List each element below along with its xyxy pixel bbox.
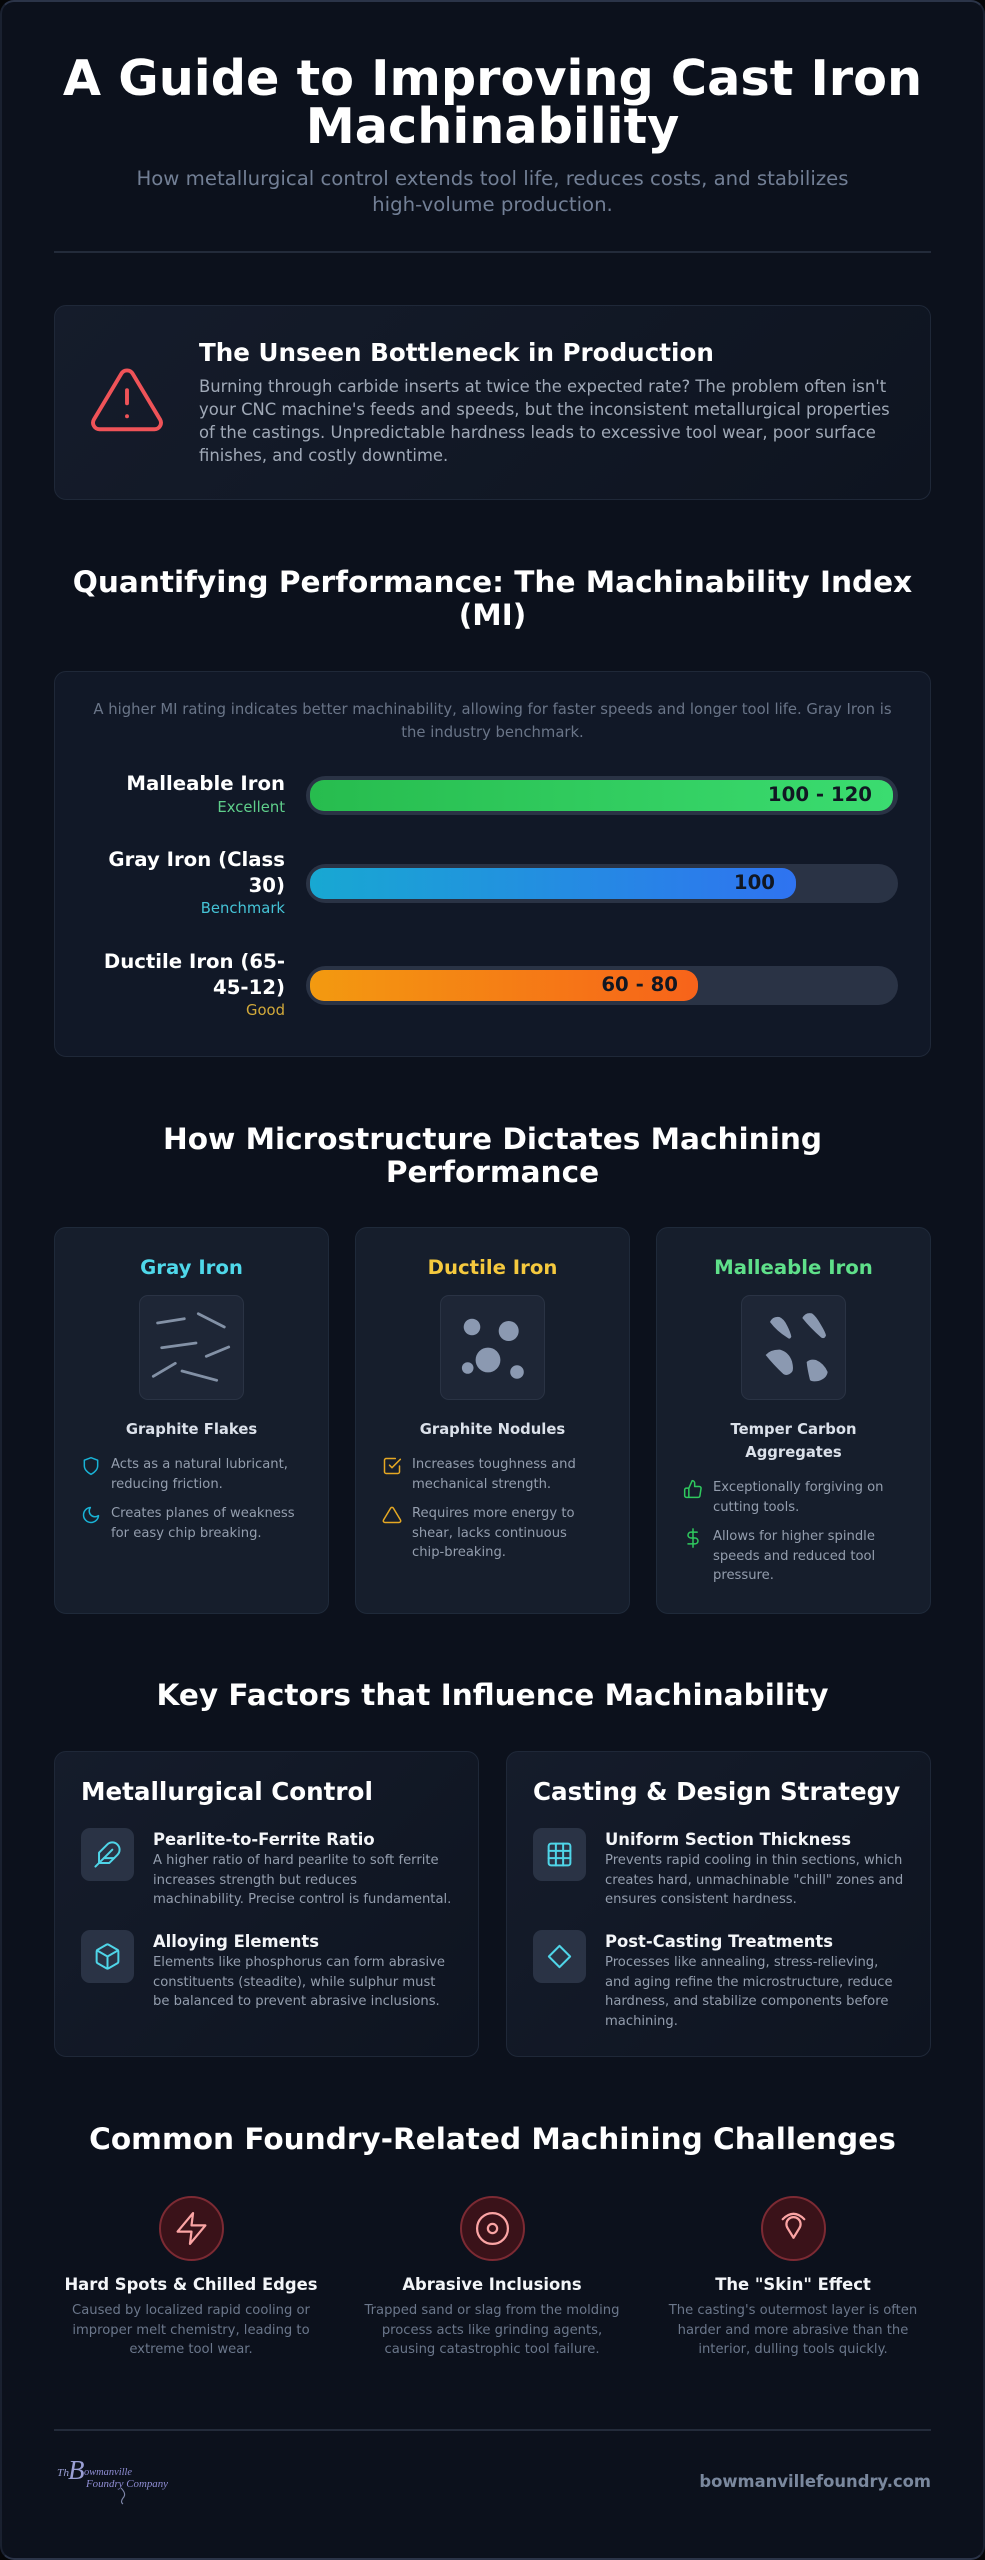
text: chip breaking: for easy chip breaking. xyxy=(111,1526,262,1541)
card subtitle: temper carbon aggregates: Aggregates xyxy=(745,1444,842,1461)
bar: 100 - 120 xyxy=(306,776,898,815)
text: alloying elements: Elements like phosphorus can form abrasive xyxy=(153,1955,445,1970)
heading: machinability index: (MI) xyxy=(459,598,526,632)
label: ductile iron xyxy=(104,950,285,999)
text: MI intro: A higher MI rating indicates better machinability, allowing for faster speeds and longer tool life. Gray Iron is xyxy=(93,701,892,718)
icon: lightning bolt xyxy=(159,2196,224,2261)
card title: ductile iron: Ductile Iron xyxy=(428,1256,557,1279)
card title: gray iron: Gray Iron xyxy=(140,1256,243,1279)
rating: good: Good xyxy=(246,1002,285,1019)
text: bottleneck description xyxy=(199,377,890,465)
panel: ductile iron xyxy=(355,1227,630,1614)
heading: machinability index: Quantifying Performance: The Machinability Index xyxy=(73,565,912,599)
title: Machinability xyxy=(306,97,679,155)
factor: pearlite ratio xyxy=(81,1828,451,1907)
text: toughness: Increases toughness and xyxy=(412,1457,576,1472)
text: alloying elements: be balanced to prevent abrasive inclusions. xyxy=(153,1994,440,2009)
text: natural lubricant: reducing friction. xyxy=(111,1477,223,1492)
text: pearlite ratio xyxy=(153,1853,451,1907)
logo: the bowmanville foundry company: B xyxy=(68,2455,84,2485)
footer divider xyxy=(54,2429,931,2431)
challenge: hard spots xyxy=(41,2196,341,2366)
text: uniform section thickness xyxy=(605,1853,903,1907)
text: bottleneck description: of the castings. Unpredictable hardness leads to excessive tool wear, poor surface xyxy=(199,423,876,442)
icon: dollar xyxy=(687,1528,699,1548)
panel title: casting and design: Casting & Design Strategy xyxy=(533,1777,900,1806)
diagram: graphite nodules xyxy=(440,1295,545,1400)
heading: microstructure: How Microstructure Dictates Machining xyxy=(163,1122,822,1156)
text: chip breaking xyxy=(111,1506,295,1541)
challenge text: skin effect: The casting's outermost layer is often xyxy=(669,2303,917,2318)
text: uniform section thickness: creates hard, unmachinable "chill" zones and xyxy=(605,1873,903,1888)
heading: microstructure xyxy=(163,1122,822,1189)
panel: malleable iron xyxy=(656,1227,931,1614)
bar: 60 - 80 xyxy=(306,966,898,1005)
logo: the bowmanville foundry company xyxy=(54,2454,169,2506)
challenge text: abrasive inclusions: causing catastrophic tool failure. xyxy=(384,2342,600,2357)
panel: machinability index chart xyxy=(54,671,931,1057)
icon: diamond xyxy=(533,1930,586,1983)
challenge: skin effect xyxy=(643,2196,943,2366)
panel: the unseen bottleneck xyxy=(54,305,931,500)
bar: 60 - 80: 60 - 80 xyxy=(601,973,678,996)
text: spindle speeds: pressure. xyxy=(713,1568,774,1583)
challenge text: skin effect xyxy=(643,2301,943,2360)
text: post-casting treatments: machining. xyxy=(605,2014,678,2029)
title xyxy=(63,49,922,155)
icon: grid xyxy=(533,1828,586,1881)
label: ductile iron: 45-12) xyxy=(213,976,285,999)
card subtitle: temper carbon aggregates xyxy=(730,1421,857,1461)
challenge title: hard spots: Hard Spots & Chilled Edges xyxy=(64,2275,318,2294)
card subtitle: graphite nodules: Graphite Nodules xyxy=(420,1421,565,1438)
text: pearlite ratio: A higher ratio of hard pearlite to soft ferrite xyxy=(153,1853,439,1868)
text: MI intro: the industry benchmark. xyxy=(401,724,584,741)
challenge title: abrasive inclusions: Abrasive Inclusions xyxy=(402,2275,582,2294)
card title: malleable iron: Malleable Iron xyxy=(714,1256,873,1279)
heading: post-casting treatments: Post-Casting Treatments xyxy=(605,1932,833,1951)
challenge text: abrasive inclusions: Trapped sand or slag from the molding xyxy=(365,2303,619,2318)
subtitle: How metallurgical control extends tool life, reduces costs, and stabilizes xyxy=(136,167,849,190)
text: alloying elements: constituents (steadite), while sulphur must xyxy=(153,1975,435,1990)
text: pearlite ratio: increases strength but reduces xyxy=(153,1873,357,1888)
icon: moon xyxy=(82,1506,100,1524)
challenge text: skin effect: interior, dulling tools quickly. xyxy=(698,2342,888,2357)
text: pearlite ratio: machinability. Precise control is fundamental. xyxy=(153,1892,451,1907)
text: bottleneck description: Burning through carbide inserts at twice the expected rate? The problem often isn't xyxy=(199,377,886,396)
label: gray iron: 30) xyxy=(249,874,285,897)
diagram: temper carbon aggregates xyxy=(741,1295,846,1400)
benefit: toughness xyxy=(384,1457,576,1492)
bar: 100: 100 xyxy=(734,871,775,894)
heading: uniform section thickness: Uniform Section Thickness xyxy=(605,1830,851,1849)
bar row: gray iron xyxy=(108,848,898,917)
text: post-casting treatments: Processes like annealing, stress-relieving, xyxy=(605,1955,878,1970)
label: ductile iron: Ductile Iron (65- xyxy=(104,950,285,973)
icon: feather xyxy=(81,1828,134,1881)
icon: thumbs up xyxy=(684,1480,702,1498)
text: natural lubricant: Acts as a natural lubricant, xyxy=(111,1457,288,1472)
panel: casting and design strategy xyxy=(506,1751,931,2057)
benefit: forgiving xyxy=(684,1480,883,1515)
challenge text: hard spots xyxy=(41,2301,341,2360)
heading: bottleneck: The Unseen Bottleneck in Production xyxy=(199,338,714,367)
benefit: natural lubricant xyxy=(84,1456,288,1492)
bar: 100 - 120: 100 - 120 xyxy=(768,783,872,806)
factor: uniform section thickness xyxy=(533,1828,903,1907)
text: spindle speeds: Allows for higher spindle xyxy=(713,1529,875,1544)
text: uniform section thickness: Prevents rapid cooling in thin sections, which xyxy=(605,1853,902,1868)
heading: pearlite ratio: Pearlite-to-Ferrite Ratio xyxy=(153,1830,375,1849)
challenge text: abrasive inclusions xyxy=(342,2301,642,2360)
text: energy to shear xyxy=(412,1506,575,1560)
text: uniform section thickness: ensures consistent hardness. xyxy=(605,1892,797,1907)
footer website: bowmanvillefoundry.com xyxy=(699,2472,931,2491)
icon: skin layer xyxy=(761,2196,826,2261)
text: post-casting treatments: and aging refine the microstructure, reduce xyxy=(605,1975,893,1990)
bar: 100 xyxy=(306,864,898,903)
subtitle xyxy=(136,167,849,216)
header divider xyxy=(54,251,931,253)
rating: benchmark: Benchmark xyxy=(201,900,285,917)
text: toughness xyxy=(412,1457,576,1492)
benefit: energy to shear xyxy=(382,1506,575,1560)
panel: gray iron xyxy=(54,1227,329,1614)
icon: shield xyxy=(84,1456,98,1476)
subtitle: high-volume production. xyxy=(372,193,613,216)
text: energy to shear: shear, lacks continuous xyxy=(412,1526,567,1541)
panel: metallurgical control xyxy=(54,1751,479,2057)
text: energy to shear: Requires more energy to xyxy=(412,1506,575,1521)
benefit: chip breaking xyxy=(82,1506,295,1541)
logo: the bowmanville foundry company: Foundry Company xyxy=(85,2478,168,2490)
text: bottleneck description: finishes, and costly downtime. xyxy=(199,446,448,465)
heading: key factors: Key Factors that Influence Machinability xyxy=(156,1678,829,1712)
icon: warning triangle xyxy=(91,368,163,432)
challenge text: skin effect: harder and more abrasive than the xyxy=(678,2323,908,2338)
text: forgiving: cutting tools. xyxy=(713,1500,799,1515)
text: bottleneck description: your CNC machine's feeds and speeds, but the inconsistent metallurgical properties xyxy=(199,400,890,419)
text: post-casting treatments: hardness, and stabilize components before xyxy=(605,1994,888,2009)
text: spindle speeds xyxy=(713,1529,875,1583)
icon: cube xyxy=(81,1930,134,1983)
factor: post-casting treatments xyxy=(533,1930,893,2029)
factor: alloying elements xyxy=(81,1930,445,2009)
logo: the bowmanville foundry company: owmanville xyxy=(84,2467,133,2478)
bar row: malleable iron xyxy=(126,772,898,816)
text: MI intro xyxy=(93,701,892,741)
text: toughness: mechanical strength. xyxy=(412,1477,551,1492)
rating: excellent: Excellent xyxy=(217,799,285,816)
diagram: graphite flakes xyxy=(139,1295,244,1400)
logo: the bowmanville foundry company: Th xyxy=(57,2468,69,2479)
challenge text: abrasive inclusions: process acts like grinding agents, xyxy=(382,2323,602,2338)
heading: machinability index xyxy=(73,565,912,632)
challenge text: hard spots: Caused by localized rapid cooling or xyxy=(72,2303,310,2318)
benefit: spindle speeds xyxy=(687,1528,875,1583)
text: spindle speeds: speeds and reduced tool xyxy=(713,1549,875,1564)
bar chart: machinability ratings xyxy=(104,772,898,1019)
challenge text: hard spots: extreme tool wear. xyxy=(129,2342,253,2357)
text: forgiving xyxy=(713,1480,883,1515)
text: energy to shear: chip-breaking. xyxy=(412,1545,506,1560)
heading: common challenges: Common Foundry-Related Machining Challenges xyxy=(89,2122,896,2156)
text: chip breaking: Creates planes of weakness xyxy=(111,1506,295,1521)
label: gray iron: Gray Iron (Class xyxy=(108,848,285,871)
challenge title: skin effect: The "Skin" Effect xyxy=(715,2275,871,2294)
text: natural lubricant xyxy=(111,1457,288,1492)
title: A Guide to Improving Cast Iron xyxy=(63,49,922,107)
panel title: metallurgical control: Metallurgical Control xyxy=(81,1777,373,1806)
heading: microstructure: Performance xyxy=(386,1155,599,1189)
label: malleable iron: Malleable Iron xyxy=(126,772,285,795)
icon: checked square xyxy=(384,1458,402,1474)
card subtitle: temper carbon aggregates: Temper Carbon xyxy=(730,1421,857,1438)
text: forgiving: Exceptionally forgiving on xyxy=(713,1480,883,1495)
icon: disc xyxy=(460,2196,525,2261)
label: gray iron xyxy=(108,848,285,897)
challenge text: hard spots: improper melt chemistry, leading to xyxy=(72,2323,310,2338)
bar row: ductile iron xyxy=(104,950,898,1019)
challenge: abrasive inclusions xyxy=(342,2196,642,2366)
card subtitle: graphite flakes: Graphite Flakes xyxy=(126,1421,257,1438)
text: alloying elements xyxy=(153,1955,445,2009)
heading: alloying elements: Alloying Elements xyxy=(153,1932,319,1951)
text: post-casting treatments xyxy=(605,1955,893,2029)
icon: triangle xyxy=(382,1506,402,1524)
